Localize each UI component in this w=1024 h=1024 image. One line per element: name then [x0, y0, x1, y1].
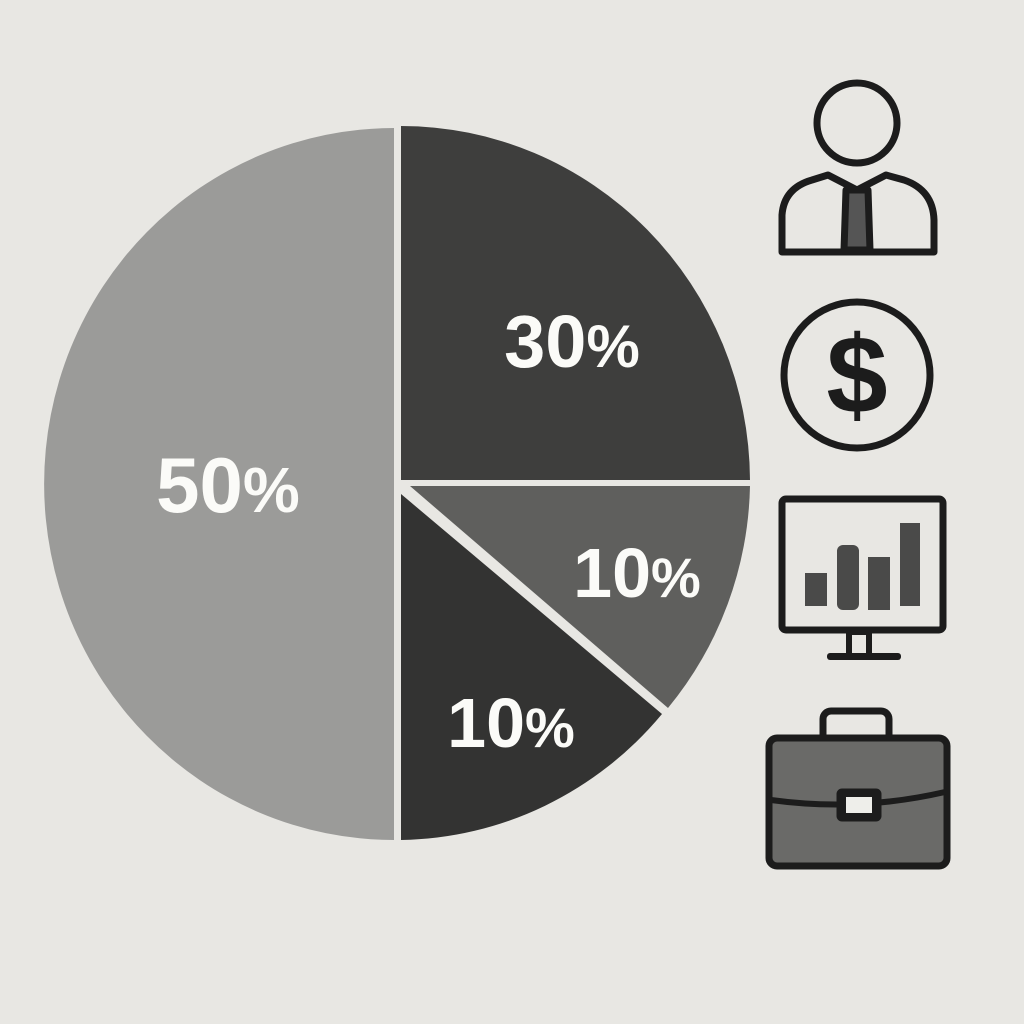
icon: dollar coin [784, 302, 930, 448]
slice: 30% [401, 126, 750, 480]
slice: 30%: 30% [504, 300, 640, 383]
slice: 10% right: 10% [573, 534, 701, 612]
slice: 50%: 50% [156, 441, 300, 529]
icon: briefcase [769, 711, 947, 866]
slice: 10% bottom: 10% [447, 684, 575, 762]
icon: person [782, 83, 934, 252]
icon: monitor with bar chart [782, 499, 943, 660]
slice: 50% [44, 128, 394, 840]
pie chart [44, 126, 750, 840]
icon: dollar coin: $ [826, 314, 888, 437]
slice: 10% right [410, 486, 750, 708]
slice: 10% bottom [401, 494, 662, 840]
